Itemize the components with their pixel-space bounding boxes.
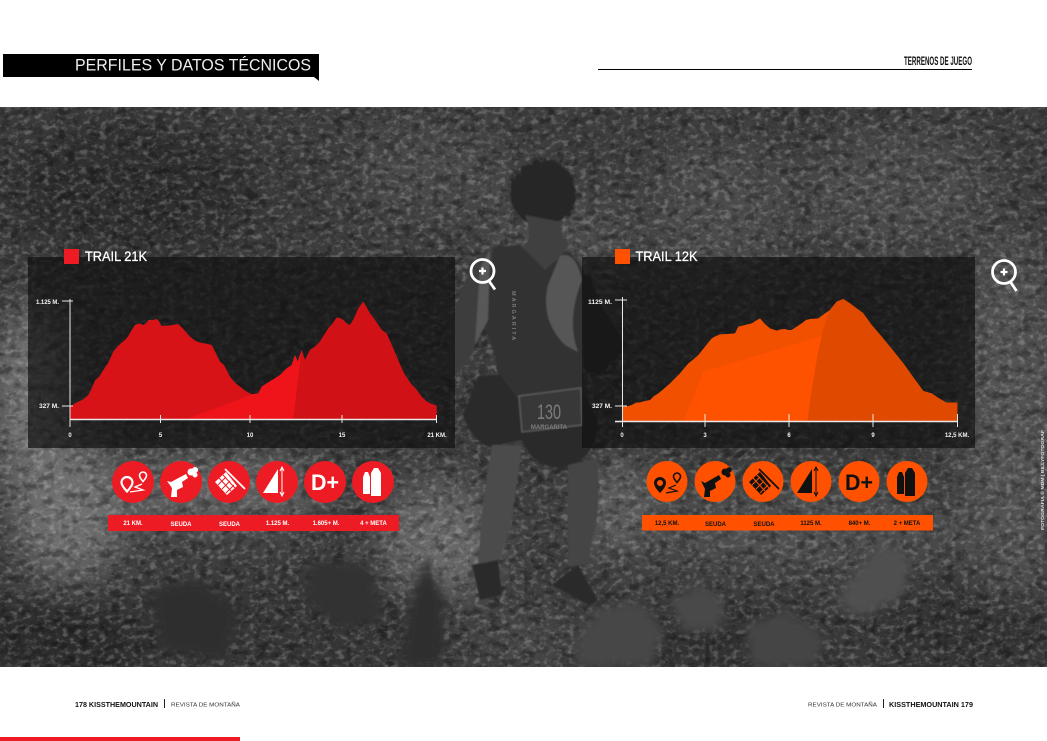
elevation profile 21k — [70, 302, 437, 419]
photo credit: FOTOGRAFÍA © MDM | BILLYFOTOGRAF — [1038, 430, 1045, 530]
axes 21k — [62, 299, 437, 427]
chart background 12k — [582, 257, 975, 448]
data bar 21k — [108, 515, 399, 531]
axis labels 12k: 0 — [620, 433, 624, 439]
icon: checkered flag — [742, 461, 784, 502]
data bar 12k: 12,5 KM. — [655, 521, 680, 527]
axis labels 21k: 10 — [247, 433, 254, 439]
footer left: 178 KISSTHEMOUNTAIN — [75, 700, 158, 709]
runner silhouette — [445, 160, 628, 606]
icon: altitude — [256, 461, 298, 503]
icon: positive elevation: D+ — [311, 470, 339, 495]
red progress bar — [0, 737, 240, 741]
axis labels 21k: 0 — [68, 433, 72, 439]
icon: aid station bottles — [886, 461, 928, 502]
axis labels 21k — [36, 300, 447, 439]
data bar 12k: 840+ M. — [849, 521, 871, 527]
background photo: trail runner in forest: MARGARITA — [531, 425, 568, 431]
data bar 21k: SEUDA — [170, 522, 192, 528]
axis labels 12k: 6 — [787, 433, 791, 439]
section header ribbon: PERFILES Y DATOS TÉCNICOS — [75, 56, 311, 74]
axis labels 12k: 3 — [703, 433, 707, 439]
data bar 12k: 2 + META — [894, 521, 921, 527]
icon: checkered flag — [208, 461, 250, 503]
data bar 21k: 1.125 M. — [266, 521, 290, 527]
panel: trail 21k — [28, 249, 455, 531]
footer left: REVISTA DE MONTAÑA — [171, 702, 240, 708]
icon: route distance — [646, 461, 688, 502]
icon: starting pistol — [160, 461, 202, 503]
footer right: REVISTA DE MONTAÑA — [808, 702, 877, 708]
data bar 12k: SEUDA — [705, 522, 727, 528]
axis labels 21k: 327 M. — [39, 404, 59, 410]
section header ribbon — [3, 54, 319, 81]
axis labels 21k: 21 KM. — [427, 433, 447, 439]
rocks — [150, 545, 910, 667]
axis labels 21k: 5 — [159, 433, 163, 439]
background photo: trail runner in forest — [0, 107, 1047, 680]
axis labels 12k: 1125 M. — [588, 300, 612, 306]
footer right: KISSTHEMOUNTAIN 179 — [889, 700, 973, 709]
icon: positive elevation — [304, 461, 346, 503]
icon row 21k — [112, 461, 394, 503]
axes 12k — [615, 297, 958, 427]
icon: altitude — [790, 461, 832, 502]
icon: zoom magnifier right — [992, 260, 1016, 291]
top right section label: TERRENOS DE JUEGO — [904, 54, 972, 68]
data bar 21k: 21 KM. — [123, 521, 143, 527]
data bar 21k: 1.605+ M. — [313, 521, 340, 527]
axis labels 21k: 1.125 M. — [36, 300, 59, 306]
axis labels 12k: 9 — [871, 433, 875, 439]
axis labels 21k: 15 — [339, 433, 346, 439]
footer left — [75, 699, 240, 709]
footer right — [808, 699, 973, 709]
icon: zoom magnifier left — [471, 260, 495, 290]
heading trail 12k: TRAIL 12K — [636, 249, 698, 264]
icon: positive elevation: D+ — [845, 470, 873, 495]
icon: aid station bottles — [352, 461, 394, 503]
panel: trail 12k — [582, 249, 975, 530]
icon: positive elevation — [838, 461, 880, 502]
axis labels 12k: 12,5 KM. — [945, 433, 970, 439]
chart background 21k — [28, 257, 455, 448]
data bar 21k: SEUDA — [219, 522, 241, 528]
data bar 12k: 1125 M. — [800, 521, 822, 527]
data bar 12k: SEUDA — [753, 522, 775, 528]
data bar 21k: 4 + META — [360, 521, 388, 527]
data bar 12k — [642, 515, 933, 530]
heading trail 21k: TRAIL 21K — [85, 249, 147, 264]
icon row 12k — [646, 461, 928, 502]
axis labels 12k: 327 M. — [592, 404, 612, 410]
elevation profile 12k — [622, 299, 957, 422]
axis labels 12k — [588, 300, 970, 439]
race bib number: 130 — [537, 401, 561, 424]
icon: route distance — [112, 461, 154, 503]
icon: starting pistol — [694, 461, 736, 502]
vest text: MARGARITA — [510, 291, 516, 342]
